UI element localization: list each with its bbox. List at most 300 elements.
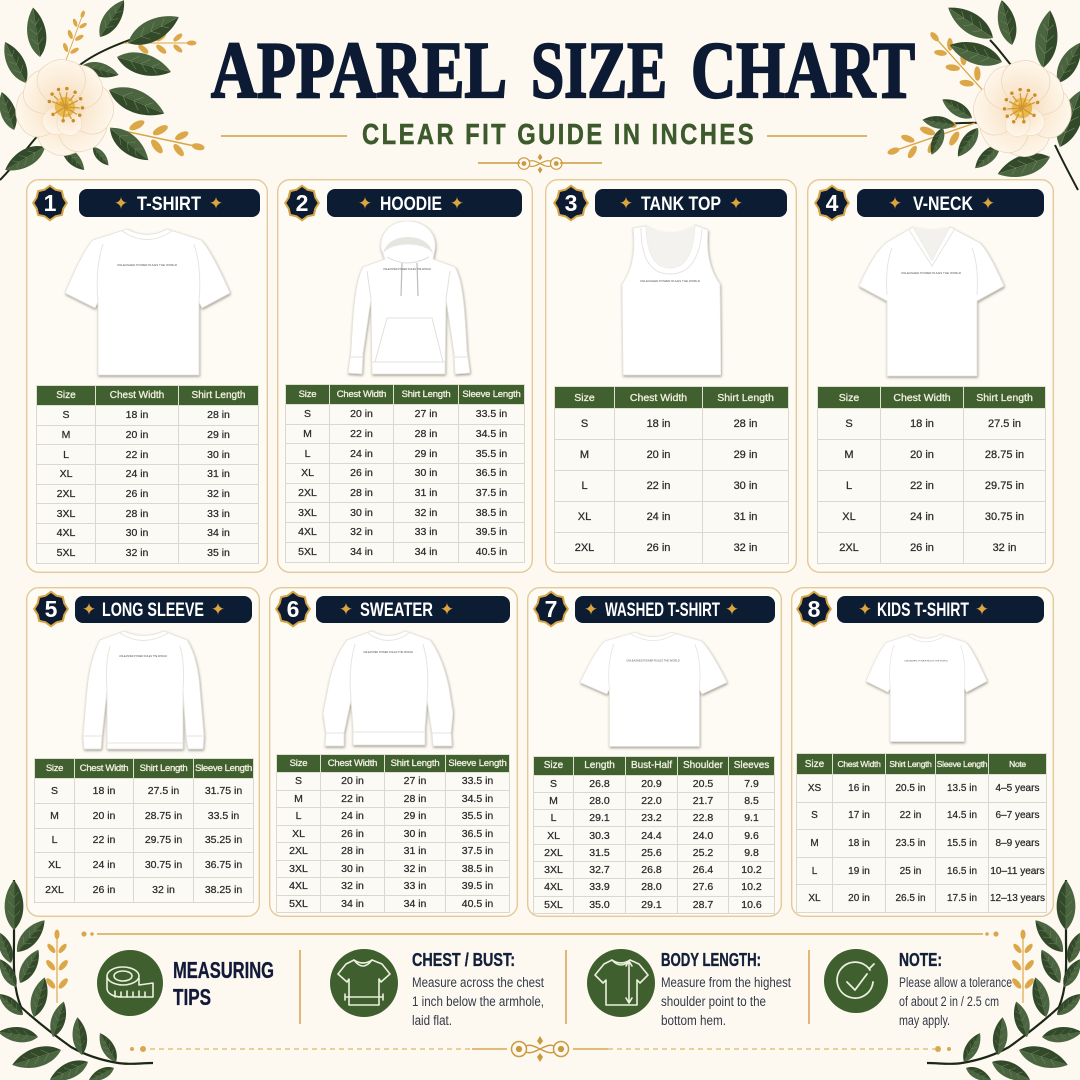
size table: 29.1 — [641, 899, 662, 911]
size table: 2XL — [57, 488, 75, 500]
size table: M — [62, 429, 70, 441]
size table: 35.5 in — [476, 448, 507, 460]
measuring tips heading: MEASURING — [173, 957, 274, 983]
size table: 24 in — [910, 511, 934, 523]
size table: 18 in — [126, 409, 148, 421]
panel frame — [278, 180, 532, 572]
size table: L — [581, 480, 588, 492]
panel 1: t-shirt — [26, 179, 268, 573]
size table — [796, 753, 1047, 913]
title pill — [575, 596, 775, 623]
title pill: ✦ — [729, 194, 743, 214]
size table: Shirt Length — [402, 389, 450, 400]
number badge: 3 — [565, 190, 577, 216]
panel frame — [27, 180, 267, 572]
title: APPAREL — [211, 25, 507, 115]
size table: Size — [805, 758, 824, 770]
title pill: ✦ — [339, 600, 353, 620]
size table: Shirt Length — [717, 392, 774, 404]
size table: 34 in — [341, 898, 364, 910]
size table — [285, 384, 525, 562]
size table: 30 in — [350, 507, 373, 519]
size table: 20 in — [341, 775, 364, 787]
icon: check — [824, 949, 888, 1013]
subtitle: CLEAR FIT GUIDE IN INCHES — [362, 119, 756, 151]
size table: 39.5 in — [476, 526, 507, 538]
size table: 26 in — [341, 828, 364, 840]
size table: 5XL — [57, 547, 75, 559]
size table: 33 in — [207, 508, 230, 520]
size table: 20 in — [126, 429, 148, 441]
size table: 31.5 — [589, 847, 610, 859]
size table: 4XL — [57, 527, 75, 539]
size table — [276, 754, 510, 913]
shirt illustration — [859, 227, 1004, 376]
size table: L — [551, 812, 556, 824]
size table: S — [550, 778, 557, 790]
size table: 35.0 — [589, 899, 610, 911]
size table: 10.6 — [741, 899, 762, 911]
size table: XL — [60, 468, 72, 480]
number badge: 7 — [545, 596, 557, 622]
tip: note: NOTE: — [899, 950, 942, 970]
title pill — [316, 596, 510, 623]
size table: Length — [584, 760, 615, 771]
number badge: 8 — [808, 596, 821, 622]
size table: 32 in — [341, 880, 364, 892]
size table: Shirt Length — [192, 390, 245, 401]
size table: Chest Width — [80, 763, 128, 774]
size table: 14.5 in — [947, 810, 977, 821]
title pill: ✦ — [440, 600, 454, 620]
title: SIZE — [531, 25, 667, 115]
size table: 24 in — [647, 511, 670, 523]
panel frame — [792, 588, 1053, 916]
title pill: HOODIE — [380, 194, 442, 215]
shirt illustration — [83, 631, 204, 749]
size table: 33.5 in — [462, 775, 493, 787]
floral: top left — [0, 0, 208, 180]
size table: 27.6 — [693, 881, 713, 893]
size table: L — [52, 834, 57, 846]
floral: bottom right — [927, 880, 1080, 1080]
shirt illustration — [866, 634, 987, 742]
size table: 22 in — [647, 480, 670, 492]
size table: 28 in — [126, 508, 148, 520]
size table: 28 in — [341, 845, 364, 857]
panel frame — [27, 588, 259, 916]
title pill — [595, 189, 787, 217]
size table: 17 in — [848, 810, 870, 821]
size table: 28.7 — [693, 899, 713, 911]
measuring tips heading — [173, 957, 274, 1010]
number badge: 1 — [44, 190, 57, 216]
size table: 33.9 — [589, 881, 610, 893]
size table: 24.0 — [693, 830, 713, 842]
ornament: header divider — [478, 154, 602, 174]
size table: 39.5 in — [462, 880, 493, 892]
size table: 26 in — [126, 488, 148, 500]
size table: 40.5 in — [476, 546, 507, 558]
size table: 22 in — [900, 810, 921, 821]
size table: 28.0 — [589, 795, 610, 807]
shirt illustration — [580, 632, 727, 746]
size table: 32 in — [404, 863, 426, 875]
tip: body length: Measure from the highest — [661, 975, 791, 990]
size table: S — [51, 785, 58, 797]
size table: 36.5 in — [462, 828, 493, 840]
size table: 6–7 years — [996, 810, 1039, 821]
title pill — [857, 189, 1044, 217]
title pill: T-SHIRT — [137, 194, 201, 215]
size table: 5XL — [289, 898, 308, 910]
size table: 29 in — [734, 449, 757, 461]
tip: note — [899, 950, 1012, 1028]
shirt illustration — [622, 225, 721, 375]
size table: 32 in — [350, 526, 373, 538]
size table: 29.1 — [589, 812, 610, 824]
size table: 7.9 — [744, 778, 759, 790]
size table: S — [62, 409, 70, 421]
panel 5: long sleeve — [26, 587, 260, 917]
size table: 4XL — [289, 880, 308, 892]
size table: 37.5 in — [476, 487, 507, 499]
size table: 24.4 — [641, 830, 662, 842]
panel frame — [270, 588, 517, 916]
size table: 10.2 — [741, 881, 762, 893]
size table: 18 in — [93, 785, 115, 797]
size table: Size — [574, 392, 595, 404]
footer bottom rule with ornament — [130, 1036, 951, 1062]
size table: 28.0 — [641, 881, 662, 893]
size table: Size — [56, 390, 76, 401]
size table: 8–9 years — [996, 838, 1039, 849]
size table: 4–5 years — [996, 783, 1039, 794]
size table: 2XL — [298, 487, 317, 499]
panel 2: hoodie — [277, 179, 533, 573]
size table: 4XL — [544, 881, 563, 893]
size table: 13.5 in — [947, 783, 977, 794]
number badge: 6 — [287, 596, 299, 622]
panel 6: sweater — [269, 587, 518, 917]
size table: 15.5 in — [947, 838, 977, 849]
footer top rule — [81, 931, 999, 937]
size table: XL — [48, 859, 61, 871]
size table — [34, 758, 254, 903]
title pill: TANK TOP — [641, 194, 721, 215]
size table: 30 in — [415, 467, 437, 479]
size table: 27.5 in — [148, 785, 179, 797]
size table: 24 in — [341, 810, 364, 822]
size table: 34.5 in — [476, 428, 507, 440]
size table: 35.25 in — [205, 834, 242, 846]
number badge: 4 — [826, 190, 839, 216]
tip: note: may apply. — [899, 1013, 950, 1028]
size table: 18 in — [647, 418, 670, 430]
number badge — [553, 184, 589, 222]
size table: 9.8 — [744, 847, 759, 859]
size table — [817, 386, 1046, 564]
size table: 29 in — [404, 810, 426, 822]
size table: 16.5 in — [947, 866, 977, 877]
size table: 38.5 in — [476, 507, 507, 519]
icon: measuring tape — [97, 950, 163, 1016]
size table: L — [305, 448, 310, 460]
size table: 2XL — [839, 542, 859, 554]
panel 4: v-neck — [807, 179, 1054, 573]
size table: Size — [290, 758, 307, 769]
size table: Sleeves — [734, 760, 769, 771]
size table: 27 in — [415, 408, 437, 420]
size table: 26 in — [647, 542, 670, 554]
title pill: ✦ — [358, 194, 372, 214]
size table: S — [295, 775, 302, 787]
size table: 3XL — [298, 507, 317, 519]
size table: M — [294, 793, 303, 805]
title pill: ✦ — [584, 600, 598, 620]
number badge — [33, 590, 69, 628]
panel 8: kids t-shirt — [791, 587, 1054, 917]
size table: L — [296, 810, 301, 822]
number badge — [533, 590, 569, 628]
size table: Shirt Length — [391, 758, 439, 769]
shirt illustration — [323, 631, 453, 746]
size table: XL — [808, 893, 821, 904]
size table: 33.5 in — [476, 408, 507, 420]
size table: 20.9 — [641, 778, 662, 790]
size table: L — [63, 449, 69, 461]
tip: chest / bust: 1 inch below the armhole, — [412, 994, 544, 1009]
size table: 22 in — [126, 449, 148, 461]
panel 7: washed t-shirt — [527, 587, 782, 917]
size table: 37.5 in — [462, 845, 493, 857]
size table: 26 in — [910, 542, 934, 554]
title pill: ✦ — [209, 194, 223, 214]
size table: 36.5 in — [476, 467, 507, 479]
size table: 32 in — [126, 547, 148, 559]
size table: 31 in — [415, 487, 437, 499]
panel frame — [808, 180, 1053, 572]
size table: 34 in — [415, 546, 437, 558]
tip: body length: shoulder point to the — [661, 994, 766, 1009]
size table: Shoulder — [683, 760, 723, 771]
title pill: V-NECK — [913, 194, 973, 215]
size table: Chest Width — [337, 389, 386, 400]
title — [211, 25, 915, 115]
size table: 2XL — [575, 542, 594, 554]
size table: 30.3 — [589, 830, 610, 842]
panel 3: tank top — [545, 179, 797, 573]
tip: chest / bust: laid flat. — [412, 1013, 452, 1028]
number badge — [796, 590, 832, 628]
size table: XL — [547, 830, 560, 842]
size table: 28.75 in — [145, 810, 182, 822]
size table: 35.5 in — [462, 810, 493, 822]
size table: 31.75 in — [205, 785, 242, 797]
size table: 5XL — [544, 899, 563, 911]
size table: 28 in — [415, 428, 437, 440]
number badge — [32, 184, 68, 222]
tip: note: of about 2 in / 2.5 cm — [899, 994, 999, 1009]
size table: 2XL — [289, 845, 308, 857]
size table: 30.75 in — [145, 859, 182, 871]
number badge — [275, 590, 311, 628]
size table: 25 in — [900, 866, 921, 877]
size table: 31 in — [404, 845, 426, 857]
tip: chest / bust: CHEST / BUST: — [412, 950, 515, 970]
number badge — [814, 184, 850, 222]
size table: Sleeve Length — [462, 389, 521, 400]
size table — [36, 385, 259, 564]
title pill: SWEATER — [360, 600, 433, 621]
floral: top right — [883, 0, 1080, 190]
size table: S — [581, 418, 588, 430]
size table: 32 in — [993, 542, 1016, 554]
size table: 10–11 years — [990, 866, 1045, 877]
size table: 20 in — [910, 449, 934, 461]
tip: chest / bust: Measure across the chest — [412, 975, 544, 990]
size table: 8.5 — [744, 795, 759, 807]
size table: XL — [578, 511, 591, 523]
measuring tips heading: TIPS — [173, 984, 211, 1010]
size table: 29 in — [415, 448, 437, 460]
size table: Shirt Length — [976, 392, 1033, 404]
size table: 38.5 in — [462, 863, 493, 875]
size table: 33 in — [404, 880, 426, 892]
size table: 32 in — [415, 507, 437, 519]
size table: Size — [544, 760, 563, 771]
size table: S — [304, 408, 311, 420]
size table: 32 in — [152, 884, 175, 896]
size table: Size — [46, 763, 63, 774]
size table: 34 in — [207, 527, 230, 539]
size table: Shirt Length — [889, 759, 932, 769]
size table: 35 in — [207, 547, 230, 559]
divider — [300, 950, 809, 1024]
size table: 36.75 in — [205, 859, 242, 871]
size table: 3XL — [57, 508, 75, 520]
title pill: WASHED T-SHIRT — [605, 600, 720, 621]
size table: 18 in — [848, 838, 870, 849]
size table: Chest Width — [893, 392, 951, 404]
size table: 29.75 in — [145, 834, 182, 846]
size table: 25.6 — [641, 847, 662, 859]
floral: bottom left — [0, 880, 153, 1080]
size table: L — [846, 480, 852, 492]
size table: 27.5 in — [988, 418, 1021, 430]
size table: S — [845, 418, 853, 430]
size table: 20 in — [93, 810, 115, 822]
size table: Chest Width — [328, 758, 377, 769]
size table: 34 in — [404, 898, 426, 910]
number badge: 2 — [296, 190, 308, 216]
size table: S — [811, 810, 818, 821]
size table: 28 in — [207, 409, 230, 421]
tip: note: Please allow a tolerance — [899, 975, 1012, 990]
size table: L — [812, 866, 817, 877]
size table: Size — [299, 389, 316, 400]
title pill — [79, 189, 260, 217]
subtitle rules — [221, 135, 867, 137]
footer: measuring tips — [81, 931, 1012, 1062]
size table: 22.0 — [641, 795, 662, 807]
size table: Shirt Length — [140, 763, 187, 774]
size table: 23.5 in — [895, 838, 926, 849]
size table: 27 in — [404, 775, 426, 787]
size table: 12–13 years — [990, 893, 1045, 904]
number badge: 5 — [45, 596, 58, 622]
size table: 30.75 in — [985, 511, 1024, 523]
size table — [554, 386, 789, 564]
tip: chest / bust — [412, 950, 544, 1028]
size table: Chest Width — [630, 392, 687, 404]
size table: Sleeve Length — [937, 759, 987, 769]
size table: 26.8 — [641, 864, 662, 876]
size table: 26.4 — [693, 864, 713, 876]
panel frame — [546, 180, 796, 572]
size table: 26.8 — [589, 778, 610, 790]
size table: 32 in — [207, 488, 230, 500]
size table: 26 in — [350, 467, 373, 479]
size table: 17.5 in — [947, 893, 977, 904]
title pill: ✦ — [858, 600, 872, 620]
title: CHART — [691, 25, 915, 115]
size table: 28 in — [734, 418, 757, 430]
size table: 24 in — [93, 859, 115, 871]
title pill: ✦ — [981, 194, 995, 214]
size table: 9.6 — [744, 830, 759, 842]
size table: 26 in — [93, 884, 115, 896]
size table: Sleeve Length — [195, 763, 252, 774]
size table: 22 in — [93, 834, 115, 846]
size table: 31 in — [207, 468, 230, 480]
size table: Chest Width — [110, 390, 164, 401]
size table: M — [580, 449, 589, 461]
title pill: LONG SLEEVE — [102, 600, 204, 621]
size table: XL — [301, 467, 314, 479]
title pill: ✦ — [450, 194, 464, 214]
size table: M — [844, 449, 854, 461]
title pill: ✦ — [82, 600, 96, 620]
tip: body length — [661, 950, 791, 1028]
size table: 22 in — [341, 793, 364, 805]
size table: 30 in — [126, 527, 148, 539]
size table: 5XL — [298, 546, 317, 558]
size table: 34.5 in — [462, 793, 493, 805]
size table: 24 in — [350, 448, 373, 460]
size table: 34 in — [350, 546, 373, 558]
size table: 26.5 in — [895, 893, 926, 904]
size table: XS — [808, 783, 821, 794]
size table: 25.2 — [693, 847, 713, 859]
size table: 28 in — [404, 793, 426, 805]
size table: 21.7 — [693, 795, 713, 807]
size table: 30 in — [341, 863, 364, 875]
size table: XL — [292, 828, 305, 840]
size table: 22 in — [350, 428, 373, 440]
size table: Chest Width — [838, 759, 880, 769]
icon: chest measure — [330, 949, 398, 1017]
size table: 18 in — [910, 418, 934, 430]
title pill: ✦ — [888, 194, 902, 214]
size table: 28 in — [350, 487, 373, 499]
size table: 20.5 — [693, 778, 713, 790]
size table: M — [810, 838, 819, 849]
size table: 32.7 — [589, 864, 610, 876]
size table: 4XL — [298, 526, 317, 538]
title pill: ✦ — [619, 194, 633, 214]
size table: 3XL — [544, 864, 563, 876]
